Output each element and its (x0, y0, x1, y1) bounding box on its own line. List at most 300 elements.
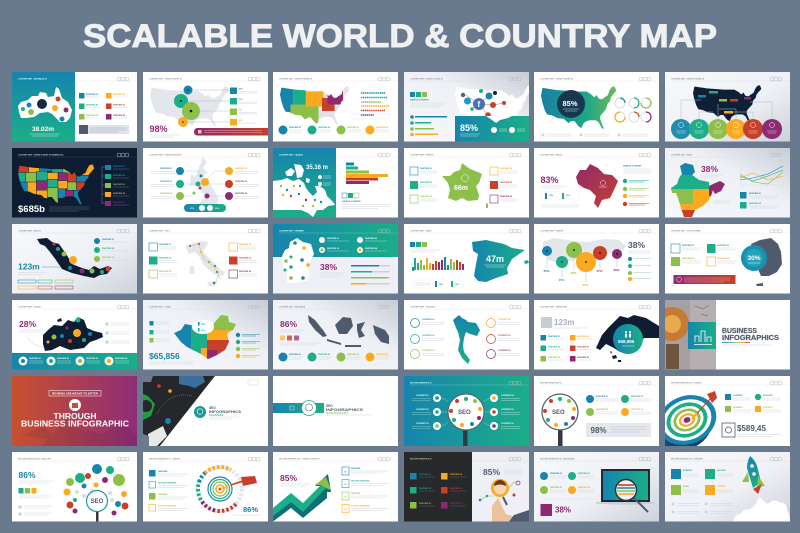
right features: FEATURE 04 (239, 243, 252, 246)
timeline icons: FEATURE 02 (113, 174, 126, 177)
map: UK (190, 157, 219, 206)
feature list: FEATURE 03 (86, 114, 99, 117)
heading: SEO (209, 406, 216, 410)
features: FEATURE 03 (102, 256, 115, 259)
labels: CONTENT 01 (422, 319, 435, 321)
features: FEATURE 01 (682, 244, 695, 247)
feature list: FEATURE 04 (113, 93, 126, 96)
figure: 47m (486, 254, 504, 264)
slide: United States, gradient: COUNTRY MAP · UNITED STATES 04 (540, 78, 574, 80)
map markers (189, 243, 218, 284)
slide: laptop magnifier (534, 452, 659, 522)
features: FEATURE 02 (682, 257, 695, 260)
feature list (79, 93, 127, 120)
bar chart (413, 257, 463, 271)
colour dots (209, 414, 223, 416)
features: FEATURE 01 (596, 395, 609, 398)
social network nodes: f (478, 100, 480, 109)
colour strip (326, 412, 348, 414)
dot rows (361, 93, 389, 115)
slide: France: COUNTRY MAP · FRANCE (410, 154, 434, 156)
callout bar (672, 274, 737, 286)
right features (229, 243, 257, 278)
feature circles: FEATURE 01 (289, 126, 302, 129)
small icons (280, 336, 299, 340)
figure 98%: 98% (150, 124, 168, 134)
left features: FEATURE 03 (420, 195, 433, 198)
slide: South Korea: COUNTRY MAP · SOUTH KOREA (671, 230, 701, 232)
features: FEATURE 02 (327, 247, 340, 250)
slide: SEO magnifier on gradient (404, 376, 529, 446)
connectors (681, 100, 772, 119)
right features (490, 167, 517, 203)
map: USA (150, 86, 229, 126)
map: China (173, 310, 238, 362)
pill: 52% (215, 208, 219, 210)
faint pattern (22, 421, 137, 446)
bottom gradient band (12, 353, 137, 370)
slide: China (143, 300, 268, 370)
slide: United Kingdom: COUNTRY MAP · UNITED KINGDOM (149, 154, 182, 156)
features (540, 472, 594, 494)
figure: 83% (540, 175, 559, 185)
photo: light bulb (655, 300, 716, 370)
slide: Spain (404, 224, 529, 294)
map: Indonesia (308, 315, 389, 347)
map: France (442, 163, 488, 208)
laptop (596, 469, 655, 505)
bottom gradient band: FEATURE 03 (86, 357, 99, 360)
features: FEATURE 01 (749, 192, 762, 195)
leader lines (188, 90, 230, 122)
line chart (740, 166, 783, 185)
labels: CONTENT 06 (498, 350, 511, 352)
slide: United States, coloured regions (273, 72, 398, 142)
features: FEATURE (158, 470, 168, 473)
slide: SEO dartboard (143, 452, 268, 522)
map: USA white (455, 86, 529, 116)
numbered list: 03 (344, 496, 347, 498)
right icons: 75% (238, 99, 243, 101)
features: FEATURE 06 (450, 502, 463, 505)
figure circle: 658,986 (618, 339, 635, 344)
right list (236, 333, 260, 358)
figure: 86% (243, 505, 258, 514)
slide: United States, social (404, 72, 532, 142)
stat icon (541, 317, 552, 328)
numbered list: 01 (344, 472, 347, 474)
target rings (208, 477, 232, 501)
slide: Canada (273, 148, 398, 218)
list (623, 179, 649, 206)
features: FEATURE 04 (577, 335, 590, 338)
slide: SEO divider band (273, 376, 398, 446)
slide: Turkey (534, 224, 659, 294)
right notes (105, 322, 129, 344)
slide: United States, dark multicolour: COUNTRY MAP · UNITED STATES OF AMERICA 06 (18, 154, 63, 156)
slide: Australia (12, 72, 137, 142)
features: FEATURE 02 (749, 202, 762, 205)
slide: SEO tree (12, 452, 137, 522)
labels (422, 318, 520, 356)
map: dark USA (693, 85, 761, 122)
left features (410, 167, 437, 203)
map: Thailand (453, 315, 480, 364)
dart (692, 391, 717, 419)
map: Mexico (37, 238, 112, 278)
features: FEATURE 06 (577, 356, 590, 359)
white bubble: 55% (201, 330, 205, 332)
slide: Indonesia (273, 300, 398, 370)
slide: rocket growth (665, 452, 790, 522)
slide: Russia: COUNTRY MAP · RUSSIA (18, 306, 41, 308)
slide: Business Infographics cover (655, 300, 790, 370)
numbered list: FEATURE (351, 467, 361, 470)
timeline icons: FEATURE 01 (113, 165, 126, 168)
figure: 38% (628, 240, 645, 250)
bottom notes (672, 502, 732, 514)
feature circles: FEATURE 02 (318, 126, 331, 129)
map: Spain (472, 240, 529, 282)
slide: Brazil: COUNTRY MAP · BRAZIL (540, 154, 563, 156)
figure circle: 30% (748, 255, 761, 262)
small icons (342, 193, 359, 198)
line chart (479, 481, 520, 501)
bottom notes (18, 505, 52, 516)
slide: Italy: COUNTRY MAP · ITALY (149, 230, 171, 232)
map: South Korea (751, 238, 782, 286)
slide: Russia (12, 300, 137, 370)
left features: FEATURE 02 (159, 256, 172, 260)
features: THIRD (683, 486, 690, 488)
figure: 38% (320, 262, 337, 272)
numbered list: 02 (344, 484, 347, 486)
features: FEATURE 02 (419, 487, 432, 490)
right icons: 25% (238, 88, 243, 90)
magnifier: SEO (552, 410, 565, 416)
features: FOURTH FEATURE (158, 504, 177, 508)
left features: FEATURE 02 (160, 180, 173, 183)
percent labels: 35% (558, 278, 565, 282)
slide: traffic growth arrow: SEO INFOGRAPHICS 06 · TRAFFIC GROWTH (279, 458, 320, 460)
icon tile (688, 322, 716, 349)
slide: India (665, 148, 790, 218)
dark panel (404, 452, 472, 522)
heading 2: INFOGRAPHICS (326, 408, 363, 412)
left features: FEATURE 01 (420, 167, 433, 170)
teal figure panel: 85% (460, 123, 478, 133)
numbered list: 04 (344, 508, 347, 511)
bubbles (542, 242, 622, 272)
slide: France (404, 148, 529, 218)
figure: $65,856 (149, 351, 180, 361)
slide: analysis with hand: SEO INFOGRAPHICS 07 (410, 458, 432, 460)
heading 2: INFOGRAPHICS (209, 410, 241, 414)
gray stat box: 98% (590, 426, 607, 435)
stat icon (540, 504, 552, 516)
right features: FEATURE 05 (239, 256, 252, 260)
percent labels: 35% (596, 269, 603, 273)
feature circles: FEATURE 03 (347, 353, 360, 356)
right features: CONTENT 06 (501, 423, 514, 425)
right features: CONTENT 05 (501, 409, 514, 411)
slide: SEO tree: SEO INFOGRAPHICS 04 · ANALYSIS (18, 458, 51, 460)
progress bars (410, 115, 447, 136)
slide: SEO magnifier on gradient: SEO INFOGRAPHICS 01 (410, 382, 432, 384)
slide: SEO cover with photo (140, 376, 268, 446)
features (149, 470, 188, 511)
timeline icons: FEATURE 05 (113, 201, 126, 204)
feature circles (671, 119, 782, 139)
features: FEATURE 02 (550, 486, 563, 489)
connectors (440, 398, 492, 426)
features: CONTENT (733, 407, 743, 409)
left features: FEATURE 03 (159, 270, 172, 273)
slide: Mexico (12, 224, 137, 294)
features: FEATURE 04 (631, 408, 644, 411)
labels: CONTENT 03 (422, 350, 435, 352)
slide: India: COUNTRY MAP · INDIA (671, 154, 692, 156)
slide: Brazil (534, 148, 659, 218)
map: Brazil (576, 164, 618, 208)
slide: Reviews title (12, 376, 137, 446)
left features (151, 167, 184, 200)
features: FEATURE 01 (550, 472, 563, 475)
right icons (230, 88, 257, 126)
features (671, 469, 733, 495)
slide: Turkey: COUNTRY MAP · TURKEY (540, 230, 564, 232)
small icons (18, 488, 36, 494)
figure: 86% (18, 470, 36, 480)
smoke cloud (733, 498, 790, 522)
slide: SEO dartboard: SEO INFOGRAPHICS 05 · TARGET (149, 458, 181, 460)
map: multicolour USA (18, 163, 95, 205)
map: India (665, 158, 729, 218)
labels: CONTENT 02 (422, 335, 435, 337)
features: FEATURE 05 (577, 346, 590, 348)
map: Singapore (596, 315, 659, 362)
slide: SEO magnifier on white (534, 376, 659, 446)
icon circle (192, 404, 208, 420)
map: coloured USA (280, 85, 350, 125)
left icons (150, 321, 169, 342)
slide: United States, social: COUNTRY MAP · UNITED STATES 03 (410, 78, 443, 80)
map markers (280, 185, 322, 207)
rocket (742, 456, 765, 494)
features: FEATURE 01 (419, 473, 432, 476)
figure: 28% (19, 319, 36, 329)
slide: SEO target: SEO INFOGRAPHICS 03 · TARGET (671, 382, 703, 384)
figure: 66m (454, 185, 468, 192)
slide: United States, dark map and circles: COUNTRY MAP · UNITED STATES 05 (671, 78, 704, 80)
heading 2: INFOGRAPHICS (722, 335, 779, 342)
right features: FEATURE 04 (235, 167, 248, 170)
timeline icons (105, 165, 129, 206)
map route (190, 244, 219, 284)
labels: CONTENT 05 (498, 335, 511, 337)
right features: FEATURE 05 (235, 180, 248, 183)
stat icon (722, 423, 735, 437)
features: FEATURE 03 (717, 244, 730, 247)
left features: FEATURE 02 (420, 181, 433, 184)
features (319, 237, 387, 253)
heading: BUSINESS (722, 328, 757, 335)
slide: South Korea (665, 224, 790, 294)
right features (225, 167, 259, 200)
slide: Spain: COUNTRY MAP · SPAIN (410, 230, 432, 232)
slide: Indonesia: COUNTRY MAP · INDONESIA (279, 306, 306, 308)
callout bar (194, 128, 274, 136)
features (540, 335, 593, 362)
timeline icons: FEATURE 03 (113, 183, 126, 186)
tags (18, 280, 73, 289)
map: Italy (185, 241, 225, 286)
labels on map (698, 91, 751, 114)
people box: 55% (566, 195, 570, 197)
heading: SEO (326, 404, 333, 408)
magnifier: SEO (458, 410, 471, 416)
target (645, 387, 725, 459)
icon ring (198, 467, 242, 511)
figure: 38.02m (32, 126, 54, 133)
SEO lens: SEO (91, 499, 104, 505)
right icons: 30% (238, 120, 243, 122)
slide: Germany (273, 224, 398, 294)
left gradient panel (273, 148, 336, 218)
summary box (79, 125, 129, 134)
numbered list: SECOND FEATURE (351, 480, 370, 482)
percent labels: 35% (614, 268, 620, 272)
figure: 123m (554, 318, 574, 327)
right features: FEATURE 06 (500, 195, 513, 198)
feature circles: FEATURE 01 (289, 353, 302, 356)
note box (352, 114, 390, 119)
white bubble: 35% (201, 324, 205, 326)
map markers (284, 241, 310, 280)
bottom gradient band: FEATURE 01 (29, 357, 42, 360)
features (740, 192, 779, 208)
features (410, 473, 466, 508)
colour strip (722, 342, 750, 344)
figure: 85% (280, 473, 297, 483)
features (671, 244, 737, 266)
title: SCALABLE WORLD & COUNTRY MAP (83, 18, 717, 54)
slide: United States, bubbles (143, 72, 274, 142)
features (586, 395, 651, 416)
slide: laptop magnifier: SEO INFOGRAPHICS 08 · KEYWORDS (540, 458, 575, 460)
left features (149, 243, 177, 278)
slide: Germany: COUNTRY MAP · GERMANY (279, 230, 305, 232)
band (273, 403, 324, 413)
features: FEATURE 01 (327, 237, 340, 240)
figure: 123m (18, 262, 40, 272)
percent labels: 35% (544, 269, 550, 273)
feature circles: FEATURE 04 (376, 126, 389, 129)
people box: 35% (549, 195, 553, 197)
labels: CONTENT 04 (498, 318, 511, 321)
features: FEATURE 04 (450, 473, 463, 476)
right features (490, 394, 520, 430)
timeline icons: FEATURE 04 (113, 192, 126, 195)
right icons: 5% (238, 110, 242, 112)
map bubbles (46, 318, 92, 344)
slide: United States, bubbles: COUNTRY MAP · UNITED STATES 01 (149, 78, 182, 80)
left features: FEATURE 01 (160, 167, 173, 170)
timeline (102, 166, 105, 204)
features: FEATURE 03 (548, 356, 561, 359)
map markers (21, 96, 68, 122)
heading: THROUGH (54, 411, 96, 421)
left features: CONTENT 03 (416, 423, 429, 425)
bar chart (346, 161, 388, 185)
features: SECOND (717, 470, 726, 472)
slide: United States, dark map and circles (665, 72, 790, 142)
hand (492, 498, 529, 522)
left gradient panel (12, 72, 75, 142)
map: gradient USA (541, 86, 616, 129)
people box: 55% (455, 284, 459, 286)
features: FEATURE 04 (717, 257, 730, 260)
features: FEATURE 03 (365, 237, 378, 240)
map: Germany (282, 238, 314, 283)
rings (615, 98, 651, 122)
heading: SAMPLE CONTENT (623, 164, 642, 168)
features: FEATURE (763, 394, 773, 397)
features: FOURTH (717, 486, 726, 488)
features: FEATURE 02 (596, 408, 609, 411)
left features: CONTENT 02 (416, 409, 429, 411)
connectors (184, 171, 225, 196)
slide: Australia: COUNTRY MAP · AUSTRALIA 01 (18, 78, 47, 80)
figure: $685b (18, 204, 45, 215)
slide: Thailand: COUNTRY MAP · THAILAND (410, 306, 436, 308)
figure: 86% (280, 319, 297, 329)
bottom gradient band: FEATURE 04 (115, 357, 128, 360)
left features: FEATURE 01 (159, 243, 172, 246)
slide: Singapore: COUNTRY MAP · SINGAPORE (540, 306, 568, 308)
percent labels: 35% (570, 271, 577, 275)
features: FEATURE 03 (419, 502, 432, 505)
map bubbles (52, 242, 110, 274)
pill (184, 204, 226, 212)
bottom notes (542, 134, 648, 136)
feature list: FEATURE 01 (86, 93, 99, 96)
map: Russia (43, 317, 103, 351)
left features: FEATURE 03 (160, 192, 173, 195)
map: Canada (273, 164, 335, 217)
right features: FEATURE 06 (235, 192, 248, 195)
slide: Thailand (404, 300, 529, 370)
slide: Singapore (534, 300, 659, 370)
left features: CONTENT 01 (416, 395, 429, 397)
dark figure circle: 85% (562, 99, 578, 108)
feature list: FEATURE 05 (113, 104, 126, 106)
slide: China: COUNTRY MAP · CHINA (149, 306, 171, 308)
slide: Italy (143, 224, 268, 294)
icon (69, 399, 81, 411)
band icon (290, 406, 294, 410)
slide: SEO magnifier on white: SEO INFOGRAPHICS 02 (540, 382, 562, 384)
slide: United States, gradient (534, 72, 659, 142)
icon circle (302, 400, 316, 416)
bottom gradient band: FEATURE 02 (57, 357, 70, 360)
figure: 35.16 m (306, 165, 328, 171)
features: FEATURE 04 (578, 486, 591, 489)
numbered list: FOURTH FEATURE (351, 504, 370, 508)
features: FEATURE 01 (548, 335, 561, 338)
map bubbles (192, 174, 210, 198)
dart (220, 476, 257, 489)
